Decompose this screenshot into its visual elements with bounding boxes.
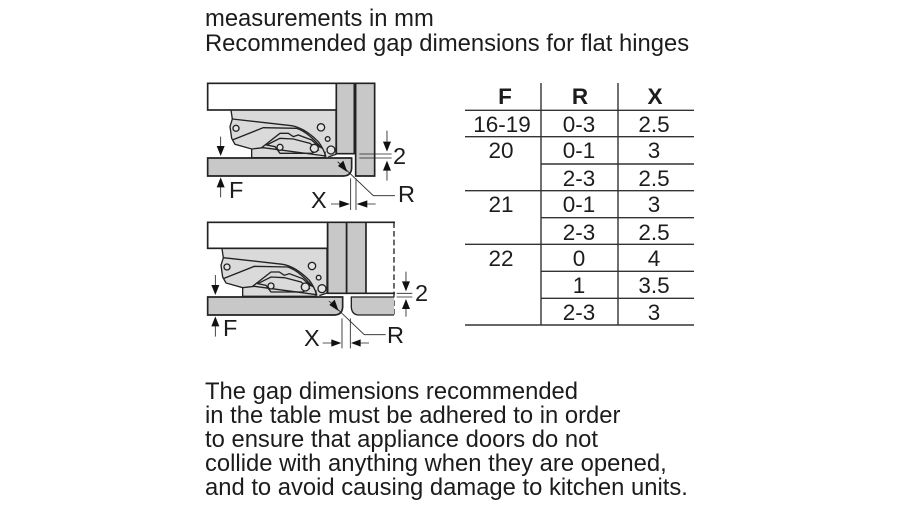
labels: bottom diagram: X (304, 325, 320, 351)
column X: 2.5 (638, 166, 670, 191)
diagram: built-in with flush door (208, 83, 395, 210)
heading: Recommended gap dimensions for flat hinges (205, 30, 689, 57)
heading: measurements in mm (205, 5, 434, 32)
carcass top panel (208, 83, 336, 110)
column X: 3.5 (638, 273, 670, 298)
column F: 22 (488, 246, 514, 271)
labels: bottom diagram (223, 280, 428, 351)
warning text (205, 378, 688, 501)
table: gap dimensions (465, 83, 694, 325)
warning text: in the table must be adhered to in order (205, 402, 620, 429)
heading (205, 5, 689, 57)
labels: top diagram: 2 (393, 143, 406, 169)
warning text: The gap dimensions recommended (205, 378, 578, 405)
hinge (221, 249, 327, 296)
door (208, 297, 343, 315)
hinge (230, 110, 336, 158)
door (208, 158, 352, 176)
labels: top diagram: R (398, 181, 415, 207)
labels: bottom diagram: R (387, 322, 404, 348)
table header: F (498, 84, 512, 109)
column R: 0-1 (563, 192, 595, 217)
column X: 4 (648, 246, 660, 271)
column X: 2.5 (638, 220, 670, 245)
labels: bottom diagram: F (223, 315, 237, 341)
gray side panels (336, 83, 354, 154)
labels: top diagram (229, 143, 415, 213)
labels: bottom diagram: 2 (415, 280, 428, 306)
column F: 20 (488, 138, 514, 163)
column R: 0 (573, 246, 585, 271)
column R: 2-3 (563, 166, 595, 191)
labels: top diagram: F (229, 177, 243, 203)
table grid (465, 83, 694, 325)
column R: 0-3 (563, 112, 595, 137)
column R: 2-3 (563, 220, 595, 245)
table header: R (572, 84, 588, 109)
column R: 0-1 (563, 138, 595, 163)
arrowheads (217, 142, 391, 208)
diagram: built-in with door above gap (208, 222, 412, 348)
gray side panels (328, 222, 347, 293)
column X: 3 (648, 192, 660, 217)
column X: 3 (648, 138, 660, 163)
table header: X (647, 84, 663, 109)
warning text: and to avoid causing damage to kitchen units. (205, 474, 688, 501)
column R: 2-3 (563, 300, 595, 325)
column X (638, 112, 670, 325)
column X: 3 (648, 300, 660, 325)
dimension lines (221, 131, 395, 210)
table header (498, 84, 663, 109)
column R (563, 112, 595, 325)
column F: 16-19 (473, 112, 531, 137)
column R: 1 (573, 273, 585, 298)
labels: top diagram: X (311, 187, 327, 213)
warning text: collide with anything when they are opened, (205, 450, 667, 477)
warning text: to ensure that appliance doors do not (205, 426, 598, 453)
column F (473, 112, 531, 271)
column F: 21 (488, 192, 514, 217)
carcass top panel (208, 222, 328, 248)
lower panel (351, 297, 394, 315)
column X: 2.5 (638, 112, 670, 137)
arrowheads (211, 281, 410, 347)
dimension lines (215, 272, 412, 348)
